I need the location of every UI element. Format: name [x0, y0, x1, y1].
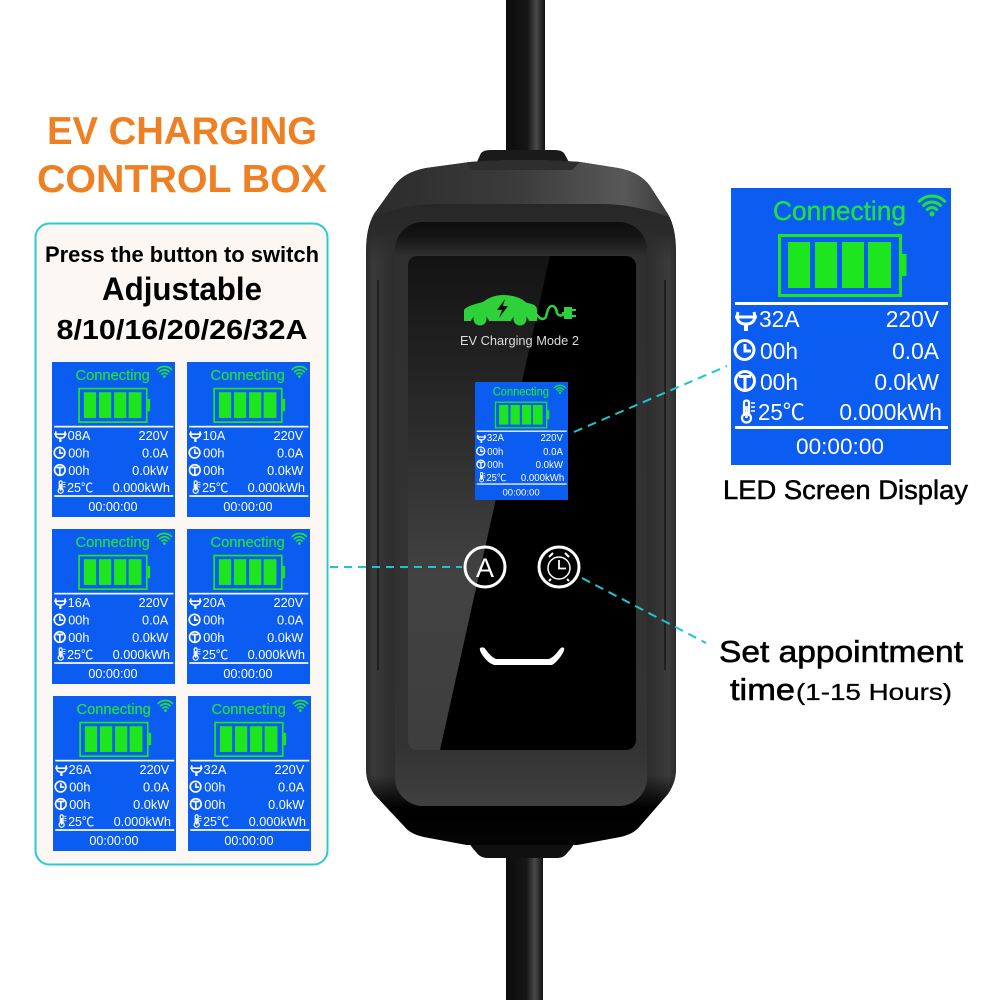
enlarged screen display: 0.0A — [892, 338, 940, 364]
screen: 10A: 00h — [203, 463, 224, 478]
enlarged screen display: 25℃ — [758, 399, 805, 425]
screen: 20A: 0.0kW — [267, 630, 303, 645]
screen: 26A — [53, 696, 176, 851]
screen: 26A: 00h — [69, 780, 90, 795]
panel heading: Press the button to switch — [45, 242, 319, 267]
device screen: 0.000kWh — [521, 473, 564, 484]
device screen: 0.0kW — [536, 460, 564, 471]
logo: electric car — [464, 295, 576, 326]
screen: 8A: 25℃ — [67, 480, 94, 495]
screen: 20A: 00:00:00 — [223, 667, 273, 681]
screen: 16A: 0.000kWh — [113, 647, 170, 662]
enlarged screen display: 220V — [886, 306, 940, 332]
title: EV CHARGING — [47, 110, 317, 153]
screen: 8A: 00:00:00 — [88, 500, 138, 514]
screen: 26A: Connecting — [76, 701, 151, 718]
screen: 8A: Connecting — [75, 367, 150, 384]
screen: 10A: 220V — [274, 428, 304, 443]
screen: 32A: 32A — [204, 762, 227, 777]
screen: 32A: 0.000kWh — [249, 814, 306, 829]
label: set appointment time: Set appointment — [719, 634, 963, 669]
screen: 10A: 10A — [203, 428, 226, 443]
label: set appointment time: (1-15 Hours) — [796, 679, 952, 705]
device screen: 00h — [487, 460, 503, 471]
label: LED screen display: LED Screen Display — [723, 475, 969, 505]
screen: 16A: 220V — [139, 595, 169, 610]
screen: 8A: 0.0A — [142, 446, 169, 461]
screen: 10A: 0.0A — [277, 446, 304, 461]
top cable — [506, 0, 545, 155]
screen: 26A: 220V — [140, 762, 170, 777]
arrow: A button to screens — [330, 566, 462, 568]
screen: 10A: 00:00:00 — [223, 500, 273, 514]
screen: 16A: 16A — [68, 595, 91, 610]
logo caption: EV Charging Mode 2 — [460, 334, 579, 348]
title — [37, 110, 327, 201]
enlarged screen display: 0.0kW — [874, 369, 939, 395]
device screen: 00h — [487, 447, 503, 458]
screen: 20A: 0.000kWh — [248, 647, 305, 662]
device screen: 00:00:00 — [503, 487, 540, 498]
arrow: device screen to enlarged display — [574, 366, 727, 432]
screen: 8A: 220V — [139, 428, 169, 443]
screen: 20A: 20A — [203, 595, 226, 610]
enlarged screen display: 32A — [759, 306, 800, 332]
screen: 8A: 0.0kW — [132, 463, 168, 478]
device screen: 32A — [487, 433, 505, 444]
screen: 32A: 00h — [204, 797, 225, 812]
panel: adjustable current — [36, 224, 328, 864]
screen: 20A: 220V — [274, 595, 304, 610]
screen: 16A — [52, 529, 175, 684]
device shell — [360, 155, 682, 850]
enlarged screen display: 00h — [760, 369, 798, 395]
device screen — [475, 382, 568, 500]
enlarged screen display: Connecting — [773, 196, 906, 226]
enlarged screen display — [731, 188, 951, 465]
screen: 16A: 25℃ — [67, 647, 94, 662]
enlarged screen display: 00:00:00 — [796, 434, 884, 459]
screen: 8A: 0.000kWh — [113, 480, 170, 495]
screen: 32A: 0.0A — [278, 780, 305, 795]
title: CONTROL BOX — [37, 158, 327, 201]
screen: 32A: 220V — [275, 762, 305, 777]
screen: 26A: 0.0kW — [133, 797, 169, 812]
control box device — [360, 0, 682, 1000]
screen: 8A: 00h — [68, 463, 89, 478]
screen: 10A: 00h — [203, 446, 224, 461]
panel heading: Adjustable — [102, 271, 262, 307]
screen: 16A: 00h — [68, 613, 89, 628]
screen: 20A: Connecting — [210, 534, 285, 551]
screen: 32A — [188, 696, 311, 851]
screen: 20A: 00h — [203, 613, 224, 628]
screen: 10A: Connecting — [210, 367, 285, 384]
enlarged screen display: 0.000kWh — [839, 399, 942, 425]
screen: 16A: 0.0A — [142, 613, 169, 628]
screen: 26A: 0.0A — [143, 780, 170, 795]
screen: 10A: 25℃ — [202, 480, 229, 495]
top collar — [476, 150, 570, 164]
screen: 16A: 00:00:00 — [88, 667, 138, 681]
screen: 26A: 0.000kWh — [114, 814, 171, 829]
screen: 10A: 0.0kW — [267, 463, 303, 478]
screen: 8A: 08A — [68, 428, 91, 443]
front glass panel — [408, 256, 636, 750]
button: alarm clock — [539, 547, 579, 587]
screen: 10A — [187, 362, 310, 517]
screen: 10A: 0.000kWh — [248, 480, 305, 495]
bottom cable — [506, 855, 543, 1000]
arrow: clock button to appointment label — [582, 578, 706, 643]
screen: 26A: 00h — [69, 797, 90, 812]
screen: 32A: 00h — [204, 780, 225, 795]
screen: 16A: Connecting — [75, 534, 150, 551]
screen: 26A: 26A — [69, 762, 92, 777]
device screen: 25℃ — [486, 473, 507, 484]
enlarged screen display: 00h — [760, 338, 798, 364]
screen: 26A: 25℃ — [68, 814, 95, 829]
screen: 20A: 00h — [203, 630, 224, 645]
label: set appointment time: time — [730, 672, 795, 707]
label: set appointment time — [719, 634, 963, 707]
screen: 32A: 00:00:00 — [224, 834, 274, 848]
screen: 32A: 0.0kW — [268, 797, 304, 812]
screen: 32A: Connecting — [211, 701, 286, 718]
screen: 20A — [187, 529, 310, 684]
screen: 20A: 25℃ — [202, 647, 229, 662]
screen: 20A: 0.0A — [277, 613, 304, 628]
device screen: Connecting — [493, 387, 549, 399]
panel heading — [45, 242, 319, 345]
screen: 32A: 25℃ — [203, 814, 230, 829]
screen: 8A — [52, 362, 175, 517]
screen: 16A: 00h — [68, 630, 89, 645]
smile indicator light — [480, 647, 564, 665]
device screen: 0.0A — [543, 447, 563, 458]
button: A: A — [476, 553, 494, 583]
screen: 8A: 00h — [68, 446, 89, 461]
device screen: 220V — [540, 433, 563, 444]
button: A — [465, 547, 505, 587]
screen: 16A: 0.0kW — [132, 630, 168, 645]
bottom collar — [468, 836, 575, 858]
panel heading: 8/10/16/20/26/32A — [56, 314, 308, 345]
screen: 26A: 00:00:00 — [89, 834, 139, 848]
